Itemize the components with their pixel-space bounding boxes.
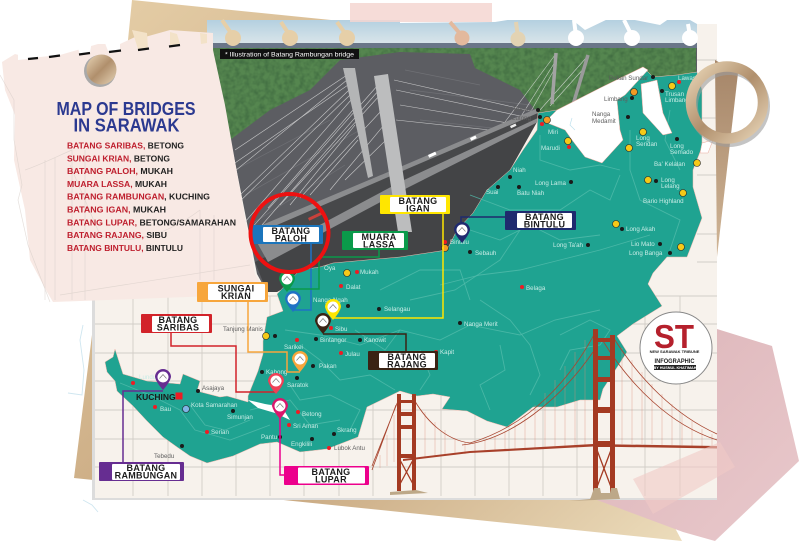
sky [207, 20, 697, 45]
bridge list: BATANG SARIBAS, BETONG [67, 142, 184, 150]
place names and dots: Lio Mato [631, 241, 655, 248]
place names and dots: Nanga Merit [464, 321, 498, 328]
place names and dots: Pantu [261, 434, 278, 441]
ST infographic badge: ST [654, 318, 694, 355]
label: Batang Bintulu: BINTULU [524, 220, 565, 230]
place names and dots: Suai [486, 189, 498, 196]
place names and dots: Pekan Sundar [609, 75, 648, 82]
place names and dots: Long [670, 143, 684, 150]
place names and dots: Oya [324, 265, 336, 272]
faint blue river traces on the white page [68, 325, 98, 512]
place names and dots: Bintulu [450, 239, 469, 246]
place names and dots: Pakan [319, 363, 337, 370]
label: Sungai Krian: KRIAN [221, 291, 251, 301]
place names and dots: Niah [513, 167, 526, 174]
place names and dots: Lawas [678, 75, 696, 82]
river [213, 48, 697, 292]
river streaks [235, 70, 530, 225]
place names and dots: Bau [160, 406, 172, 413]
place names and dots: Belaga [526, 285, 546, 292]
title: MAP OF BRIDGES [56, 99, 196, 119]
ST infographic badge: NEW SARAWAK TRIBUNE [650, 349, 700, 354]
faint bridge watermark [0, 75, 250, 302]
label: Batang Rambungan [99, 462, 184, 481]
place names and dots: Seridan [636, 141, 658, 148]
place names and dots: Tanjung Manis [223, 326, 263, 333]
red highlight circle [250, 194, 328, 272]
cables [230, 55, 586, 230]
label: Batang Rajang [368, 351, 438, 370]
tan backing paper [74, 0, 682, 541]
label: Batang Saribas: BATANG [159, 315, 197, 325]
golden gate style bridge illustration [372, 329, 717, 501]
place names and dots: Skrang [337, 427, 357, 434]
Kuching capital marker: KUCHING [136, 392, 176, 402]
ST infographic badge: BY HUSNUL KHATIMAH [653, 366, 697, 370]
place names and dots: Engkilili [291, 441, 312, 448]
bridge list: BATANG BINTULU, BINTULU [67, 244, 183, 253]
place names and dots: Sarikei [284, 344, 303, 351]
place names and dots: Kabong [266, 369, 288, 376]
label: Batang Bintulu: BATANG [525, 212, 564, 222]
bridge list: MUARA LASSA, MUKAH [67, 180, 167, 189]
place names and dots: Nanga [592, 111, 611, 118]
place names and dots: Long Lama [535, 180, 567, 187]
label: Batang Lupar: BATANG [312, 467, 350, 477]
place names and dots: Sibu [335, 326, 348, 333]
Rajang estuary channel [248, 400, 290, 420]
place names and dots: Nanga Ngah [313, 297, 348, 304]
title [56, 99, 196, 136]
label: Batang Igan: IGAN [406, 204, 430, 214]
place names and dots: Trusan [665, 91, 685, 98]
place names and dots: Ba' Kelalan [654, 161, 686, 168]
deck [250, 108, 538, 262]
label: Batang Rajang: BATANG [388, 352, 426, 362]
photo caption [220, 49, 359, 59]
place names and dots: Lubok Antu [334, 445, 366, 452]
pin [84, 54, 116, 87]
place names and dots: Julau [345, 351, 360, 358]
label: Muara Lassa: MUARA [362, 232, 397, 242]
label: Batang Igan: BATANG [399, 196, 437, 206]
place names and dots: K. Baram [506, 106, 532, 113]
bridge photo illustration [207, 20, 697, 292]
place names and dots: Kapit [440, 349, 454, 356]
torn binding marks [18, 30, 120, 60]
place names and dots: Bintangor [320, 337, 346, 344]
label: Batang Bintulu [505, 211, 576, 230]
place names and dots: Lutong [512, 115, 531, 122]
bridge list: BATANG LUPAR, BETONG/SAMARAHAN [67, 218, 236, 227]
label: Batang Saribas: SARIBAS [157, 322, 199, 332]
bridge list: BATANG RAJANG, SIBU [67, 231, 167, 240]
rivers [120, 110, 680, 440]
place names and dots: Long Ta'ah [553, 242, 584, 249]
bridge list [67, 142, 236, 253]
label: Batang Rambungan: RAMBUNGAN [115, 470, 177, 480]
shadow water under the deck [255, 122, 537, 292]
place names and dots: Selangau [384, 306, 411, 313]
place names and dots: Sri Aman [293, 423, 319, 430]
place names and dots: Long Akah [626, 226, 656, 233]
place names and dots: Batu Niah [517, 190, 545, 197]
airport markers [182, 82, 700, 412]
place names and dots: Miri [548, 129, 558, 136]
map pins [155, 222, 470, 419]
label: Batang Rajang: RAJANG [387, 360, 427, 370]
place names and dots: Saratok [287, 382, 309, 389]
place names and dots: Lelang [661, 183, 680, 190]
label: Batang Rambungan: BATANG [127, 463, 165, 473]
ST infographic badge [640, 312, 712, 384]
binder pointer strip [715, 60, 738, 257]
label: Batang Lupar: LUPAR [315, 474, 347, 484]
label: Batang Saribas [141, 314, 212, 333]
Brunei and Temburong white areas [545, 67, 713, 163]
place names and dots: Bario Highland [643, 198, 684, 205]
place names and dots [131, 75, 696, 460]
bridge list: BATANG IGAN, MUKAH [67, 206, 166, 214]
tape strip bottom right [633, 442, 735, 514]
bridge list: BATANG PALOH, MUKAH [67, 167, 173, 176]
title: IN SARAWAK [74, 116, 180, 136]
place names and dots: Betong [302, 411, 322, 418]
connector lines [123, 214, 505, 475]
place names and dots: Marudi [541, 145, 560, 152]
place names and dots: Sebauh [475, 250, 497, 257]
place names and dots: Medamit [592, 118, 616, 125]
place names and dots: Simunjan [227, 414, 253, 421]
bridge list: SUNGAI KRIAN, BETONG [67, 154, 170, 163]
note paper panel [0, 30, 267, 302]
place names and dots: Limbang [604, 96, 628, 103]
place names and dots: Dalat [346, 284, 361, 291]
Sarawak map land [105, 67, 702, 463]
map paper sheet [92, 24, 717, 500]
place names and dots: Kanowit [364, 337, 386, 344]
label: Sungai Krian [197, 282, 268, 302]
place names and dots: Lundu [139, 374, 157, 381]
ST infographic badge: INFOGRAPHIC [654, 359, 695, 365]
place names and dots: Tebedu [154, 453, 175, 460]
cars [428, 152, 437, 158]
place names and dots: Long [636, 135, 650, 142]
pink backing sheet [597, 329, 799, 541]
bridge list: BATANG RAMBUNGAN , KUCHING [67, 193, 210, 202]
binder ring [691, 66, 765, 142]
forest banks [213, 48, 696, 139]
label: Sungai Krian: SUNGAI [218, 284, 254, 294]
place names and dots: Kota Samarahan [191, 402, 238, 409]
label: Batang Paloh: PALOH [275, 234, 307, 244]
label: Batang Paloh [252, 225, 323, 244]
place names and dots: Limbang [665, 97, 689, 104]
place names and dots: Mukah [360, 269, 379, 276]
label: Batang Lupar [284, 466, 369, 485]
pylons [343, 68, 373, 178]
place names and dots: Serian [211, 429, 229, 436]
label: Batang Paloh: BATANG [272, 226, 310, 236]
place names and dots: Semado [670, 149, 694, 156]
torn binder strip at the top [222, 0, 800, 46]
label: Batang Igan [380, 195, 450, 214]
photo caption: * Illustration of Batang Rambungan bridge [225, 52, 355, 58]
place names and dots: Long [661, 177, 675, 184]
label: Muara Lassa [342, 231, 408, 250]
place names and dots: Asajaya [202, 385, 225, 392]
label: Muara Lassa: LASSA [363, 240, 395, 250]
place names and dots: Long Banga [629, 250, 663, 257]
